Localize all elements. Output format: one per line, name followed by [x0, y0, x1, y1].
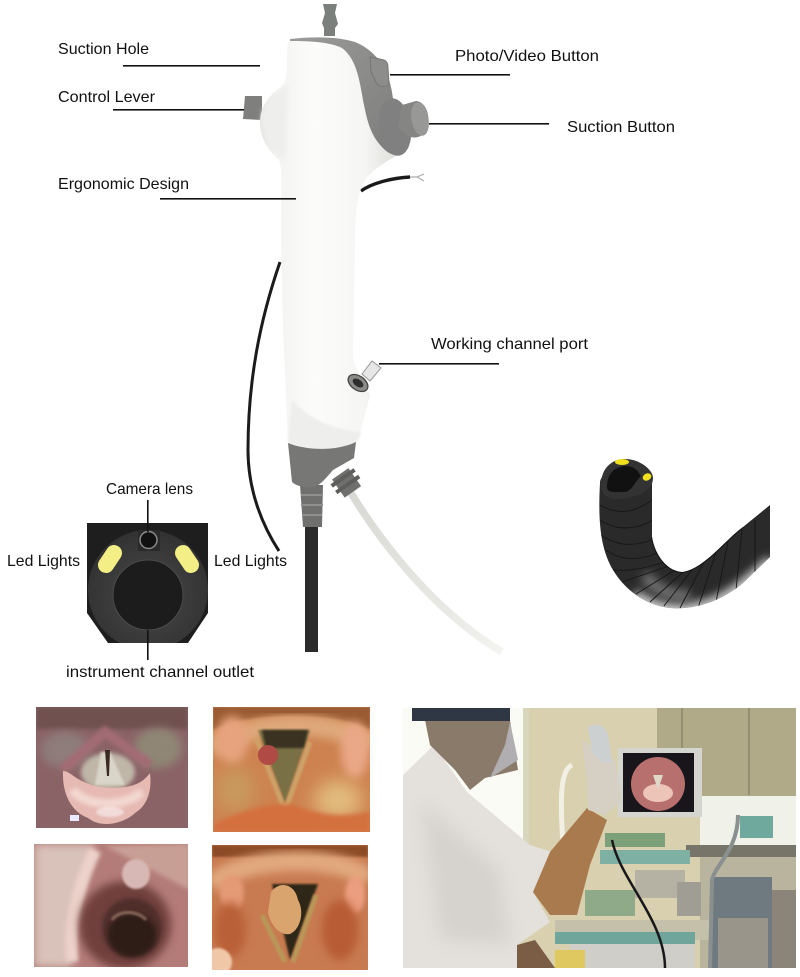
black insertion tube [305, 525, 318, 652]
lower arm [533, 808, 607, 915]
lumen [607, 466, 641, 492]
gloved hand [582, 740, 622, 815]
yellow lights [615, 459, 629, 465]
monitor [618, 748, 702, 817]
callout: control lever: Control Lever [58, 89, 156, 106]
photo: doctor using scope with monitor [403, 708, 796, 968]
camera lens label [106, 481, 193, 532]
lower body dark [517, 940, 555, 968]
left LED [106, 553, 114, 565]
handle body [260, 38, 400, 449]
room background [517, 708, 700, 968]
tube mouth [601, 459, 653, 499]
stand pole [710, 815, 738, 968]
cart and supplies [555, 833, 710, 968]
window blinds [657, 708, 796, 796]
lower window [686, 796, 796, 968]
thin black cable loop on left [248, 262, 280, 551]
photo/video button [370, 57, 389, 86]
photo: trachea view with pale polyp [34, 844, 190, 969]
face shield [490, 722, 518, 778]
scope tip face diagram [87, 523, 208, 650]
photo: larynx with large tan polyp [204, 845, 368, 976]
gray lower collar [288, 442, 356, 487]
hose barb on top [322, 4, 338, 36]
right LED [183, 553, 191, 565]
coat shading [426, 816, 506, 943]
gray top cap [290, 37, 401, 155]
endoscope handle illustration [243, 4, 502, 652]
camera lens label: Camera lens [106, 481, 193, 498]
photo: larynx with small red polyp [213, 707, 370, 832]
instrument channel [113, 560, 183, 630]
camera lens icon [138, 530, 160, 551]
callout: ergonomic design: Ergonomic Design [58, 176, 189, 193]
left LED label: Led Lights [7, 553, 80, 570]
right LED label: Led Lights [214, 553, 287, 570]
surgical cap [412, 708, 510, 721]
gray face disc [88, 530, 208, 650]
callout: suction hole: Suction Hole [58, 41, 149, 58]
scope handle in photo [588, 725, 612, 763]
doctor's coat [403, 745, 552, 968]
photo: larynx with pale epiglottis [36, 707, 188, 828]
ribbed strain relief [300, 485, 323, 527]
yellow light two [641, 472, 653, 482]
small wire at top right [361, 174, 424, 191]
soft shading on handle [262, 84, 362, 449]
instrument channel label: instrument channel outlet [66, 664, 255, 681]
tip housing [87, 523, 208, 643]
bending section of scope tip [599, 459, 774, 613]
head [425, 720, 518, 790]
white hose on wall [561, 765, 572, 845]
suction button [375, 96, 431, 158]
callout: suction button: Suction Button [567, 119, 675, 136]
tube base [599, 470, 770, 608]
callout: working channel port: Working channel port [431, 336, 589, 353]
highlight on outer bend [600, 500, 774, 613]
scope cable [612, 840, 665, 968]
equipment cabinet [712, 877, 796, 968]
callout: photo/video button: Photo/Video Button [455, 48, 599, 65]
control lever [243, 96, 262, 120]
clear suction tube [348, 488, 502, 652]
working channel port [345, 361, 381, 395]
side tube connector [329, 466, 364, 500]
